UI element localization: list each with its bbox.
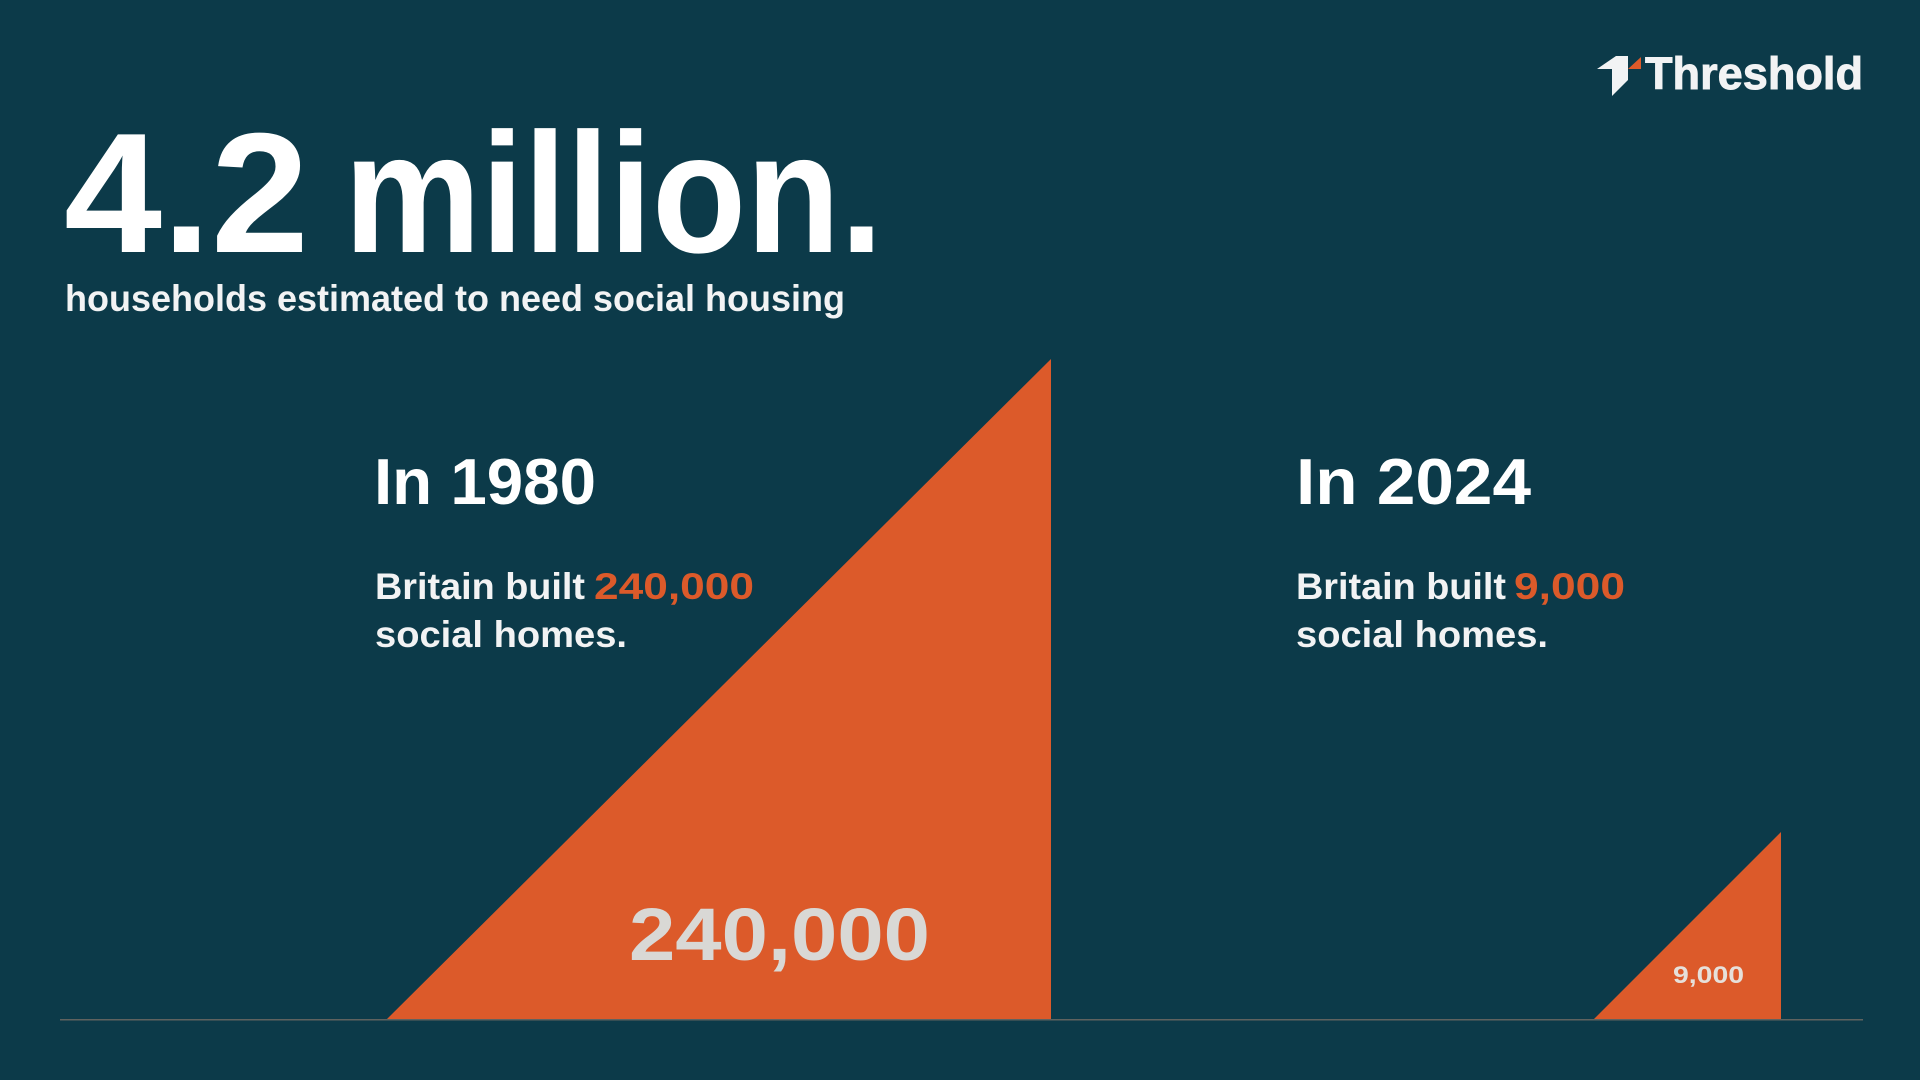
title: 4.2 million.: 4.2 (64, 98, 309, 289)
text: social homes.: social homes. (375, 614, 627, 655)
icon: threshold arrow mark (1597, 56, 1641, 96)
heading: In 2024: In 2024 (1296, 445, 1531, 518)
triangle: 2024 volume (1594, 832, 1781, 1019)
text: 240,000 highlight: 240,000 (594, 566, 754, 607)
text: social homes.: social homes. (1296, 614, 1548, 655)
panel: 2024 (1296, 445, 1625, 655)
title: 4.2 million.: million. (344, 98, 883, 289)
value label: 9,000: 9,000 (1673, 962, 1744, 989)
value label: 240,000: 240,000 (629, 893, 930, 976)
title: 4.2 million. (64, 98, 883, 289)
text: Britain built: Britain built (375, 566, 585, 607)
subtitle: households estimated to need social housing (65, 278, 845, 319)
baseline axis (60, 1019, 1863, 1020)
text: Britain built: Britain built (1296, 566, 1506, 607)
logo: Threshold (1597, 48, 1863, 99)
panel: 1980 (374, 445, 754, 655)
logo wordmark: Threshold (1645, 48, 1863, 99)
text: 9,000 highlight: 9,000 (1514, 566, 1625, 607)
triangle: 1980 volume (387, 359, 1051, 1019)
heading: In 1980: In 1980 (374, 445, 596, 518)
